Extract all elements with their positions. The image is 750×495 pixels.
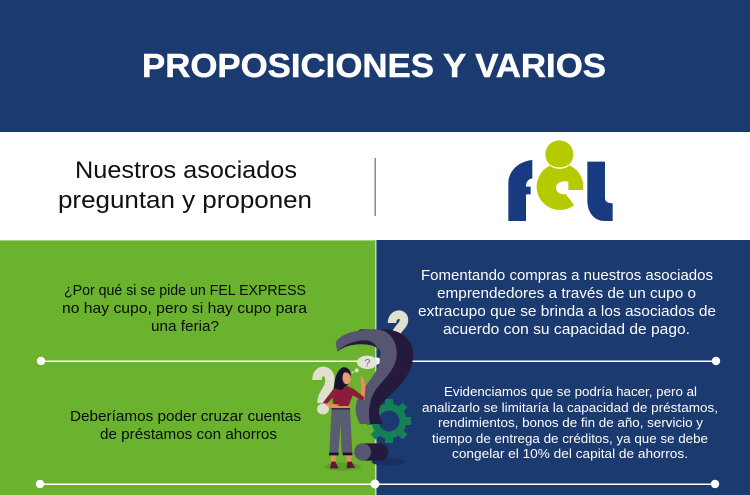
text: question 2 (70, 408, 301, 443)
panel: questions (green) (0, 240, 375, 495)
illustration: woman with question marks (317, 315, 413, 471)
text: answer 2: tiempo de entrega de créditos, ya que se debe (432, 431, 708, 446)
divider line with dots: lower (36, 480, 719, 488)
icon: gear (367, 399, 411, 443)
text: answer 2: congelar el 10% del capital de ahorros. (452, 446, 688, 461)
subtitle: Nuestros asociados (75, 157, 297, 184)
top (323, 385, 364, 406)
text: answer 1: emprendedores a través de un cupo o (437, 285, 696, 302)
shoes (330, 462, 339, 468)
text: question 1: ¿Por qué si se pide un FEL EXPRESS (64, 282, 306, 299)
text: question 2: Deberíamos poder cruzar cuentas (70, 408, 301, 425)
text: question 1: una feria? (151, 318, 219, 335)
subtitle (58, 157, 312, 214)
panel: answers (navy) (375, 240, 750, 495)
subtitle: preguntan y proponen (58, 187, 312, 214)
waist (333, 405, 349, 409)
left hand (323, 403, 339, 409)
text: question 2: de préstamos con ahorros (100, 426, 277, 443)
legs (331, 455, 336, 462)
hair (334, 367, 351, 397)
text: answer 2: analizarlo se limitaría la capacidad de préstamos, (422, 400, 718, 415)
text: answer 1: Fomentando compras a nuestros asociados (421, 267, 713, 284)
icon: thought bubble (352, 356, 378, 373)
title: PROPOSICIONES Y VARIOS (142, 48, 606, 85)
icon: large question mark (324, 329, 413, 471)
divider line with dots: upper (37, 357, 720, 365)
text: answer 2 (422, 384, 718, 461)
text: question 1 (62, 282, 308, 335)
icon: pale question mark, back right (392, 315, 404, 336)
text: answer 1 (418, 267, 716, 338)
text: answer 2: Evidenciamos que se podría hacer, pero al (444, 384, 697, 399)
trousers (329, 408, 352, 453)
icon: thought bubble: ? (364, 357, 370, 369)
text: answer 1: extracupo que se brinda a los asociados de (418, 303, 716, 320)
logo: FEL (508, 140, 613, 221)
panel: subtitle band (0, 132, 750, 240)
panel: title banner (0, 0, 750, 132)
icon: woman (323, 367, 366, 468)
right forearm (361, 376, 366, 400)
face (343, 372, 351, 384)
text: answer 1: acuerdo con su capacidad de pago. (443, 321, 690, 338)
text: question 1: no hay cupo, pero si hay cupo para (62, 300, 308, 317)
icon: pale question mark, left (317, 371, 330, 414)
text: answer 2: rendimientos, bonos de fin de año, servicio y (438, 415, 704, 430)
